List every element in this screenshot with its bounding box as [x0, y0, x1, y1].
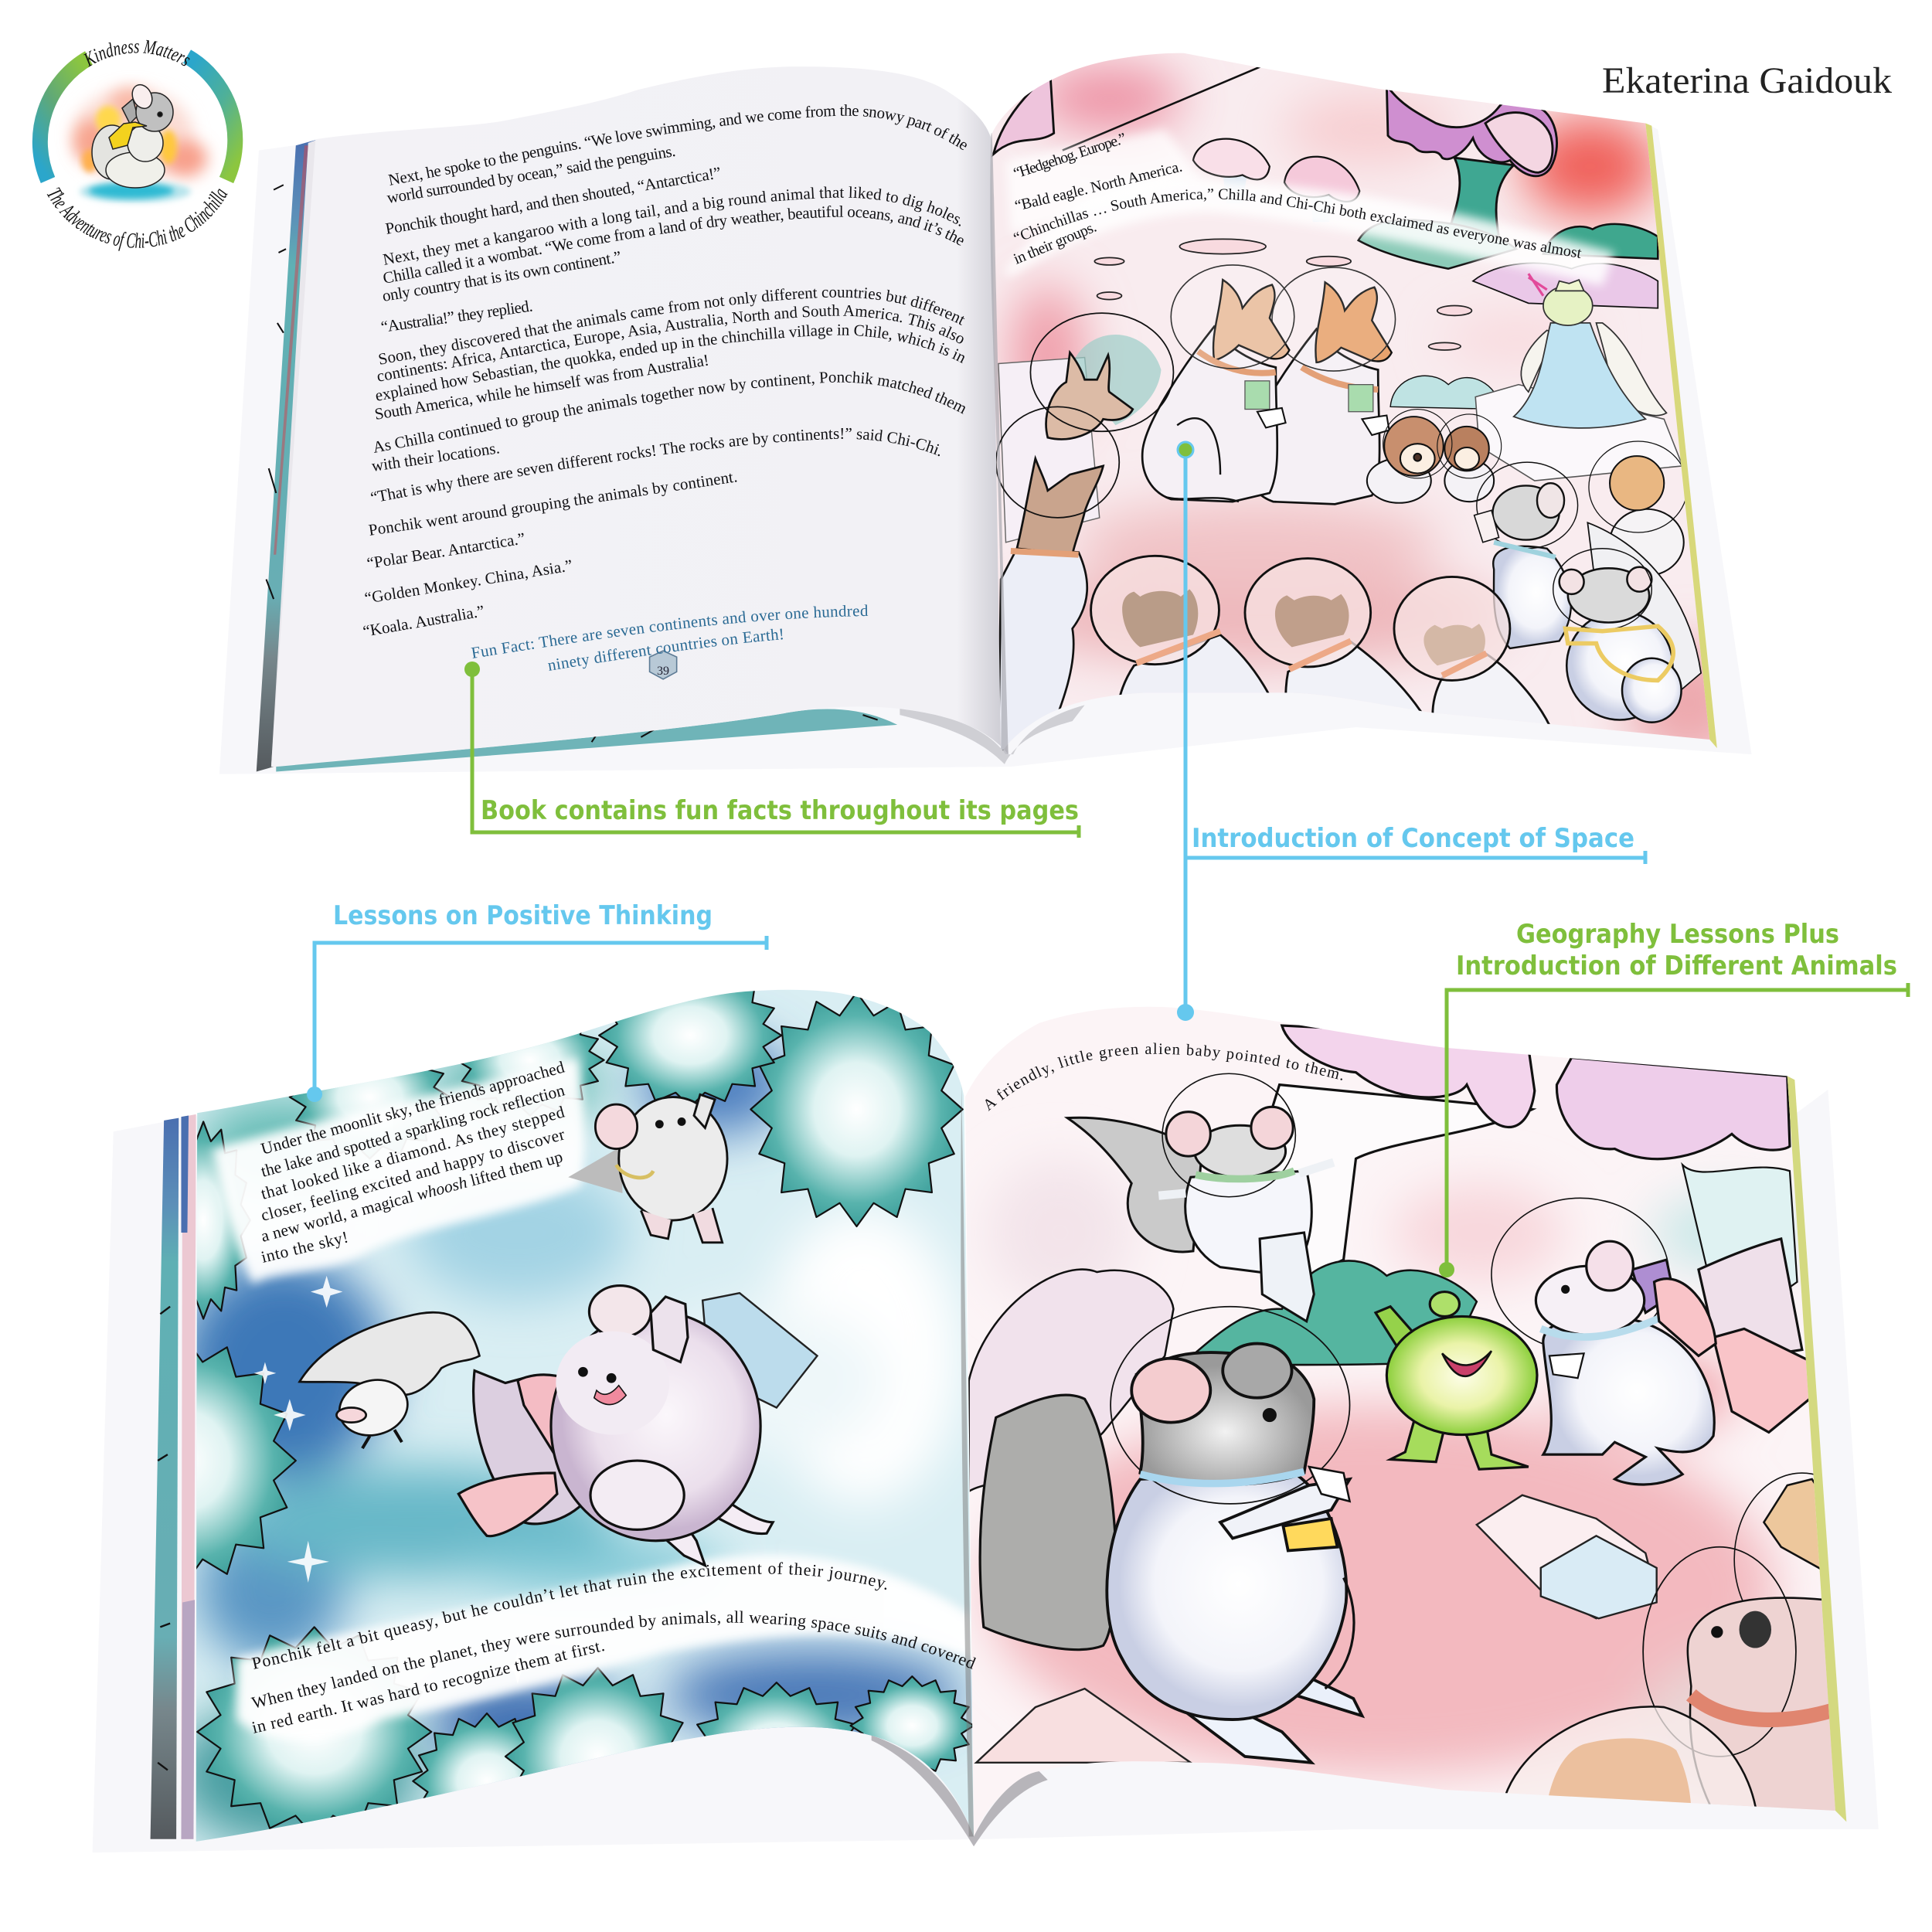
right page text — [1011, 130, 1583, 268]
callout: geography lessons: Geography Lessons Plus — [1516, 919, 1839, 950]
callout: concept of space — [1177, 442, 1645, 1021]
page number: 39 — [657, 665, 669, 678]
right page: space scene — [992, 53, 1709, 751]
fun fact text: Fun Fact: There are seven continents and over one hundred — [470, 601, 869, 662]
lower story text: in red earth. It was hard to recognize them at first. — [250, 1635, 607, 1737]
purple tree — [994, 73, 1557, 236]
lower story text: Ponchik felt a bit queasy, but he couldn’t let that ruin the excitement of their journey. — [250, 1559, 892, 1673]
teal bush — [1185, 1260, 1477, 1365]
right page text: “Hedgehog. Europe.” — [1012, 130, 1128, 182]
left page body text: Ponchik thought hard, and then shouted, “Antarctica!” — [385, 167, 719, 234]
sky colour washes — [172, 1036, 961, 1849]
hedgehogs — [1367, 410, 1502, 503]
page number hexagon — [650, 651, 677, 679]
pink tree canopy — [1257, 1026, 1798, 1307]
left page body text: South America, while he himself was from Australia! — [373, 351, 710, 423]
left page body text: “Koala. Australia.” — [362, 601, 486, 641]
grey tail large — [980, 1395, 1115, 1650]
logo: Kindness Matters badge — [40, 35, 235, 253]
spine curve — [990, 133, 1009, 754]
corner crystal — [976, 1689, 1191, 1763]
lower story text: When they landed on the planet, they were surrounded by animals, all wearing space suits and covered — [250, 1607, 978, 1713]
quokka seal and bear in helmets — [1502, 1473, 1870, 1812]
author name: Ekaterina Gaidouk — [1602, 60, 1892, 101]
back row animals — [1091, 556, 1556, 740]
left page body text: only country that is its own continent.” — [381, 247, 623, 305]
bubble text: into the sky! — [260, 1228, 350, 1267]
callout: fun facts — [464, 662, 1079, 838]
bubble text: the lake and spotted a sparkling rock reflection — [259, 1080, 566, 1181]
chi-chi with backpack — [1553, 549, 1682, 723]
teal and purple bushes — [1359, 219, 1658, 410]
left page body text: Soon, they discovered that the animals came from not only different countries but different — [376, 283, 968, 369]
sparkles — [254, 1276, 534, 1684]
upper chinchilla — [568, 1094, 727, 1243]
alien caption text: A friendly, little green alien baby pointed to them. — [980, 1041, 1346, 1114]
right page stacked edge — [1645, 124, 1717, 748]
right page: planet scene — [961, 998, 1870, 1837]
white text band — [1005, 176, 1614, 286]
panel: bottom book spread — [74, 964, 1879, 1852]
top book illustration and pages — [219, 37, 1751, 777]
kangaroo one — [1142, 265, 1294, 502]
alien baby — [1376, 1292, 1537, 1469]
white chinchilla by alien — [1492, 1198, 1714, 1485]
pink hill line — [1063, 63, 1270, 151]
left page body text: continents: Africa, Antarctica, Europe, Asia, Australia, North and South America. This also — [375, 301, 968, 386]
spine shadow and page block — [872, 1736, 1048, 1846]
callout: concept of space: Introduction of Concept of Space — [1192, 823, 1634, 854]
logo chinchilla — [92, 81, 173, 188]
left page: white text page — [271, 66, 1009, 767]
flying chinchilla with scarf — [1067, 1073, 1334, 1321]
left page body text: Ponchik went around grouping the animals by continent. — [367, 467, 739, 539]
fun fact text: ninety different countries on Earth! — [546, 624, 785, 675]
teal bursts — [74, 964, 974, 1849]
stacked page edge left — [257, 139, 318, 771]
logo ring — [40, 56, 235, 180]
panel: top book spread — [257, 53, 1717, 771]
chinchilla with card — [1475, 462, 1578, 648]
callout: geography lessons: Introduction of Different Animals — [1456, 951, 1897, 981]
right page text: “Chinchillas … South America,” Chilla and Chi-Chi both exclaimed as everyone was almost — [1011, 185, 1583, 262]
left side kangaroos — [996, 313, 1173, 752]
ice crystal — [702, 1293, 817, 1407]
stacked pages left — [151, 1118, 179, 1839]
bubble text — [259, 1058, 566, 1267]
logo watercolor background — [73, 89, 207, 202]
left page body text: Next, he spoke to the penguins. “We love swimming, and we come from the snowy part of the — [388, 104, 967, 185]
left page body text: Chilla called it a wombat. “We come from a land of dry weather, beautiful oceans, and it’s the — [383, 206, 964, 283]
alien fairy on platform — [1514, 274, 1666, 428]
lower story text — [250, 1559, 978, 1737]
left page body text: “Golden Monkey. China, Asia.” — [363, 556, 573, 607]
big flying chinchilla with pink bag — [458, 1286, 773, 1566]
left page body text: Next, they met a kangaroo with a long tail, and a big round animal that liked to dig holes. — [383, 186, 961, 265]
lavender bush left — [969, 1270, 1173, 1492]
left page body text: with their locations. — [370, 438, 501, 475]
left page: night sky scene — [74, 964, 998, 1849]
right page text: “Bald eagle. North America. — [1013, 158, 1184, 215]
background colour washes — [1011, 66, 1750, 764]
left page body text: As Chilla continued to group the animals together now by continent, Ponchik matched them — [371, 368, 970, 457]
floating squirrel friend — [300, 1312, 479, 1448]
quokka with tail behind — [1587, 441, 1701, 715]
bubble text: a new world, a magical whoosh lifted them up — [259, 1148, 565, 1246]
bubble text: that looked like a diamond. As they stepped — [259, 1103, 566, 1203]
white text bubble top — [212, 1058, 585, 1284]
callout: positive thinking — [307, 900, 767, 1102]
underpage teal — [276, 709, 897, 771]
ground rings — [1094, 239, 1471, 350]
logo text bottom: The Adventures of Chi-Chi the Chinchilla — [46, 187, 228, 251]
crystal platform — [1475, 385, 1682, 481]
ground crystal — [1477, 1495, 1657, 1618]
left page body text: world surrounded by ocean,” said the penguins. — [386, 148, 675, 202]
kangaroo two — [1245, 267, 1396, 504]
ground and wash — [986, 1158, 1861, 1800]
right stacked edge — [1787, 1076, 1846, 1821]
callout: positive thinking: Lessons on Positive Thinking — [333, 900, 713, 931]
white text band bottom — [236, 1555, 980, 1740]
left page body text: “That is why there are seven different rocks! The rocks are by continents!” said Chi-Chi. — [369, 424, 946, 507]
bubble text: closer, feeling excited and happy to discover — [259, 1125, 566, 1225]
left page body text: explained how Sebastian, the quokka, ended up in the chinchilla village in Chile, which is in — [373, 321, 970, 405]
logo text top: Kindness Matters — [83, 40, 190, 67]
bottom book illustration and pages — [74, 964, 1879, 1852]
callout: geography lessons — [1439, 919, 1908, 1277]
backing plate — [93, 1090, 1879, 1852]
pink bow — [1654, 1239, 1812, 1432]
left page body text: “Australia!” they replied. — [379, 296, 534, 336]
callout: fun facts: Book contains fun facts throughout its pages — [481, 795, 1079, 826]
bubble text: Under the moonlit sky, the friends approached — [259, 1058, 566, 1158]
left page body text — [362, 101, 972, 641]
right page text: in their groups. — [1011, 219, 1099, 268]
large chinchilla in space suit — [1107, 1307, 1362, 1763]
backing plate — [219, 124, 1751, 774]
left page body text: “Polar Bear. Antarctica.” — [366, 529, 526, 573]
mushroom trees — [1192, 138, 1360, 202]
